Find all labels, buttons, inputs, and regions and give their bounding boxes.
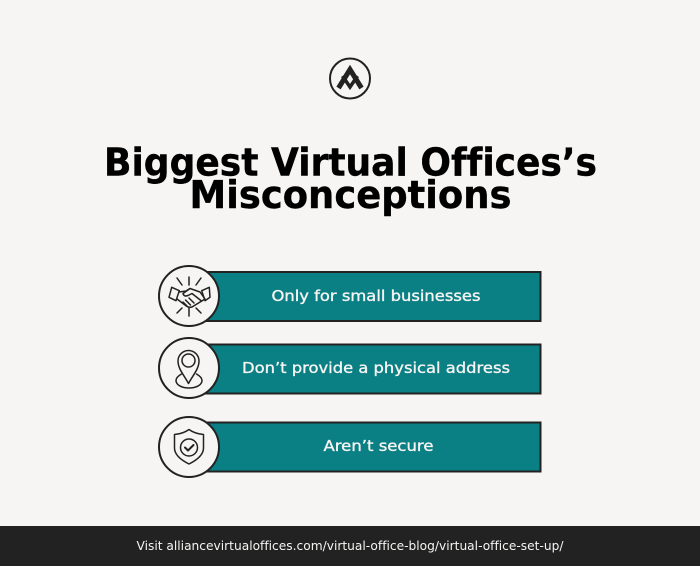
panel: misconception 1 xyxy=(159,266,540,326)
panel: misconception 2 xyxy=(159,338,540,398)
icon: map pin xyxy=(159,338,219,398)
label: not secure: Aren’t secure xyxy=(324,437,434,455)
bar: only for small businesses xyxy=(190,272,540,321)
icon: shield xyxy=(159,417,219,477)
panel: misconception 3 xyxy=(159,417,540,477)
label: only for small businesses: Only for small businesses xyxy=(272,287,481,305)
label: physical address: Don’t provide a physical address xyxy=(242,359,510,377)
title: Biggest Virtual Offices’s xyxy=(104,140,597,186)
icon: handshake xyxy=(159,266,219,326)
bar: not secure xyxy=(190,422,540,472)
bar: physical address xyxy=(190,344,540,394)
footer bar xyxy=(0,526,700,566)
icon: brand logo xyxy=(330,58,370,98)
title xyxy=(104,140,597,218)
footer link text: Visit alliancevirtualoffices.com/virtual-office-blog/virtual-office-set-up/ xyxy=(136,539,564,553)
title: Misconceptions xyxy=(190,173,512,218)
